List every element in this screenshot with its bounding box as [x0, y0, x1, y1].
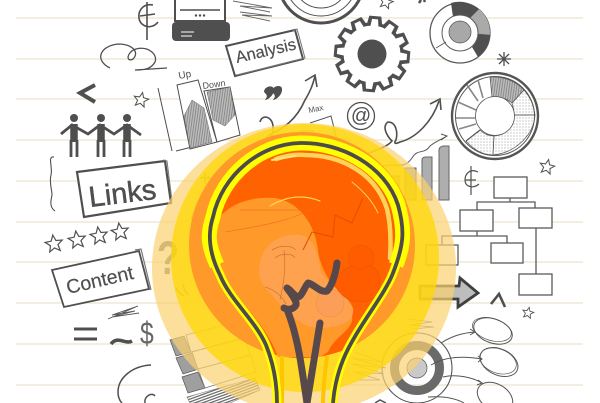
icon: bottom curve	[118, 365, 155, 403]
icon: three people	[61, 114, 141, 157]
box: Links label	[77, 160, 172, 217]
icon: small star top	[378, 0, 395, 9]
bulb wall: thick upper band	[209, 143, 403, 265]
icon: equals	[74, 329, 97, 339]
chart: target with arrows to ovals	[382, 313, 523, 403]
chart: big donut	[452, 73, 538, 159]
box: Links label: Links	[87, 174, 158, 214]
scribble: small hatch	[108, 306, 139, 319]
icon: at sign: @	[351, 105, 371, 127]
bulb wall: dark outline	[210, 143, 402, 403]
box: Analysis label: Analysis	[234, 36, 298, 67]
chart: stacked cards	[170, 322, 260, 403]
icon: caret	[491, 294, 505, 307]
icon: cent sign top	[139, 2, 158, 40]
chart: rising bars with wavy arrow	[378, 134, 449, 200]
bulb interior: mid orange blob	[215, 198, 352, 357]
chart: up and down	[158, 69, 240, 151]
filament	[284, 263, 337, 403]
chart: up and down: Down	[202, 78, 226, 91]
bulb interior: faint sketch lines	[265, 246, 344, 317]
bulb interior: faint red line chart	[225, 198, 380, 302]
arrow: block arrow	[420, 278, 478, 307]
icon: tilde	[111, 340, 132, 344]
light bulb	[209, 143, 403, 403]
bulb interior: pale orange blob	[259, 235, 353, 328]
icon: star right	[539, 158, 556, 175]
glow: pale halo	[152, 123, 456, 403]
faint sketches beneath glow	[157, 159, 242, 296]
icon: small star lower right	[522, 306, 535, 319]
neck tint	[282, 356, 327, 403]
bulb interior: deep orange	[220, 150, 396, 358]
chart: Max mini chart	[300, 103, 337, 140]
chart: up and down: Up	[178, 69, 193, 82]
scribble top	[233, 1, 272, 21]
scribble: hatch right	[352, 319, 434, 380]
icon: gear	[333, 15, 411, 93]
arrow: loop arrow right	[368, 99, 441, 153]
icon: star	[133, 91, 150, 108]
icon: less-than mark	[80, 85, 95, 102]
rating stars	[44, 222, 130, 252]
glow: yellow disc	[171, 124, 439, 392]
bulb wall: yellow band	[210, 143, 402, 403]
icon: curl scribble	[101, 44, 167, 70]
icon: small triangle bottom	[375, 400, 386, 403]
icon: cent sign right	[465, 166, 479, 195]
icon: monitor and device	[172, 0, 230, 41]
faint sketches beneath glow: 3m	[223, 159, 242, 176]
glow: orange disc	[189, 132, 415, 358]
icon: brace squiggle	[50, 157, 55, 211]
box: Analysis label	[226, 29, 305, 76]
icon: top fragment	[419, 0, 425, 3]
highlights	[270, 155, 391, 258]
icon: at sign	[348, 102, 374, 130]
icon: asterisk	[497, 52, 511, 66]
chart: Max mini chart: Max	[308, 103, 324, 115]
icon: dollar: $	[140, 316, 154, 352]
faint sketches beneath glow: ?	[157, 231, 179, 284]
box: Content label: Content	[64, 262, 136, 299]
icon: quote marks	[264, 86, 282, 100]
chart: flow diagram	[426, 177, 552, 295]
chart: small pie top right	[430, 2, 490, 63]
box: Content label	[52, 249, 151, 307]
arrow: curved arrow upper	[260, 75, 317, 139]
icon: top circle rings	[278, 0, 364, 23]
